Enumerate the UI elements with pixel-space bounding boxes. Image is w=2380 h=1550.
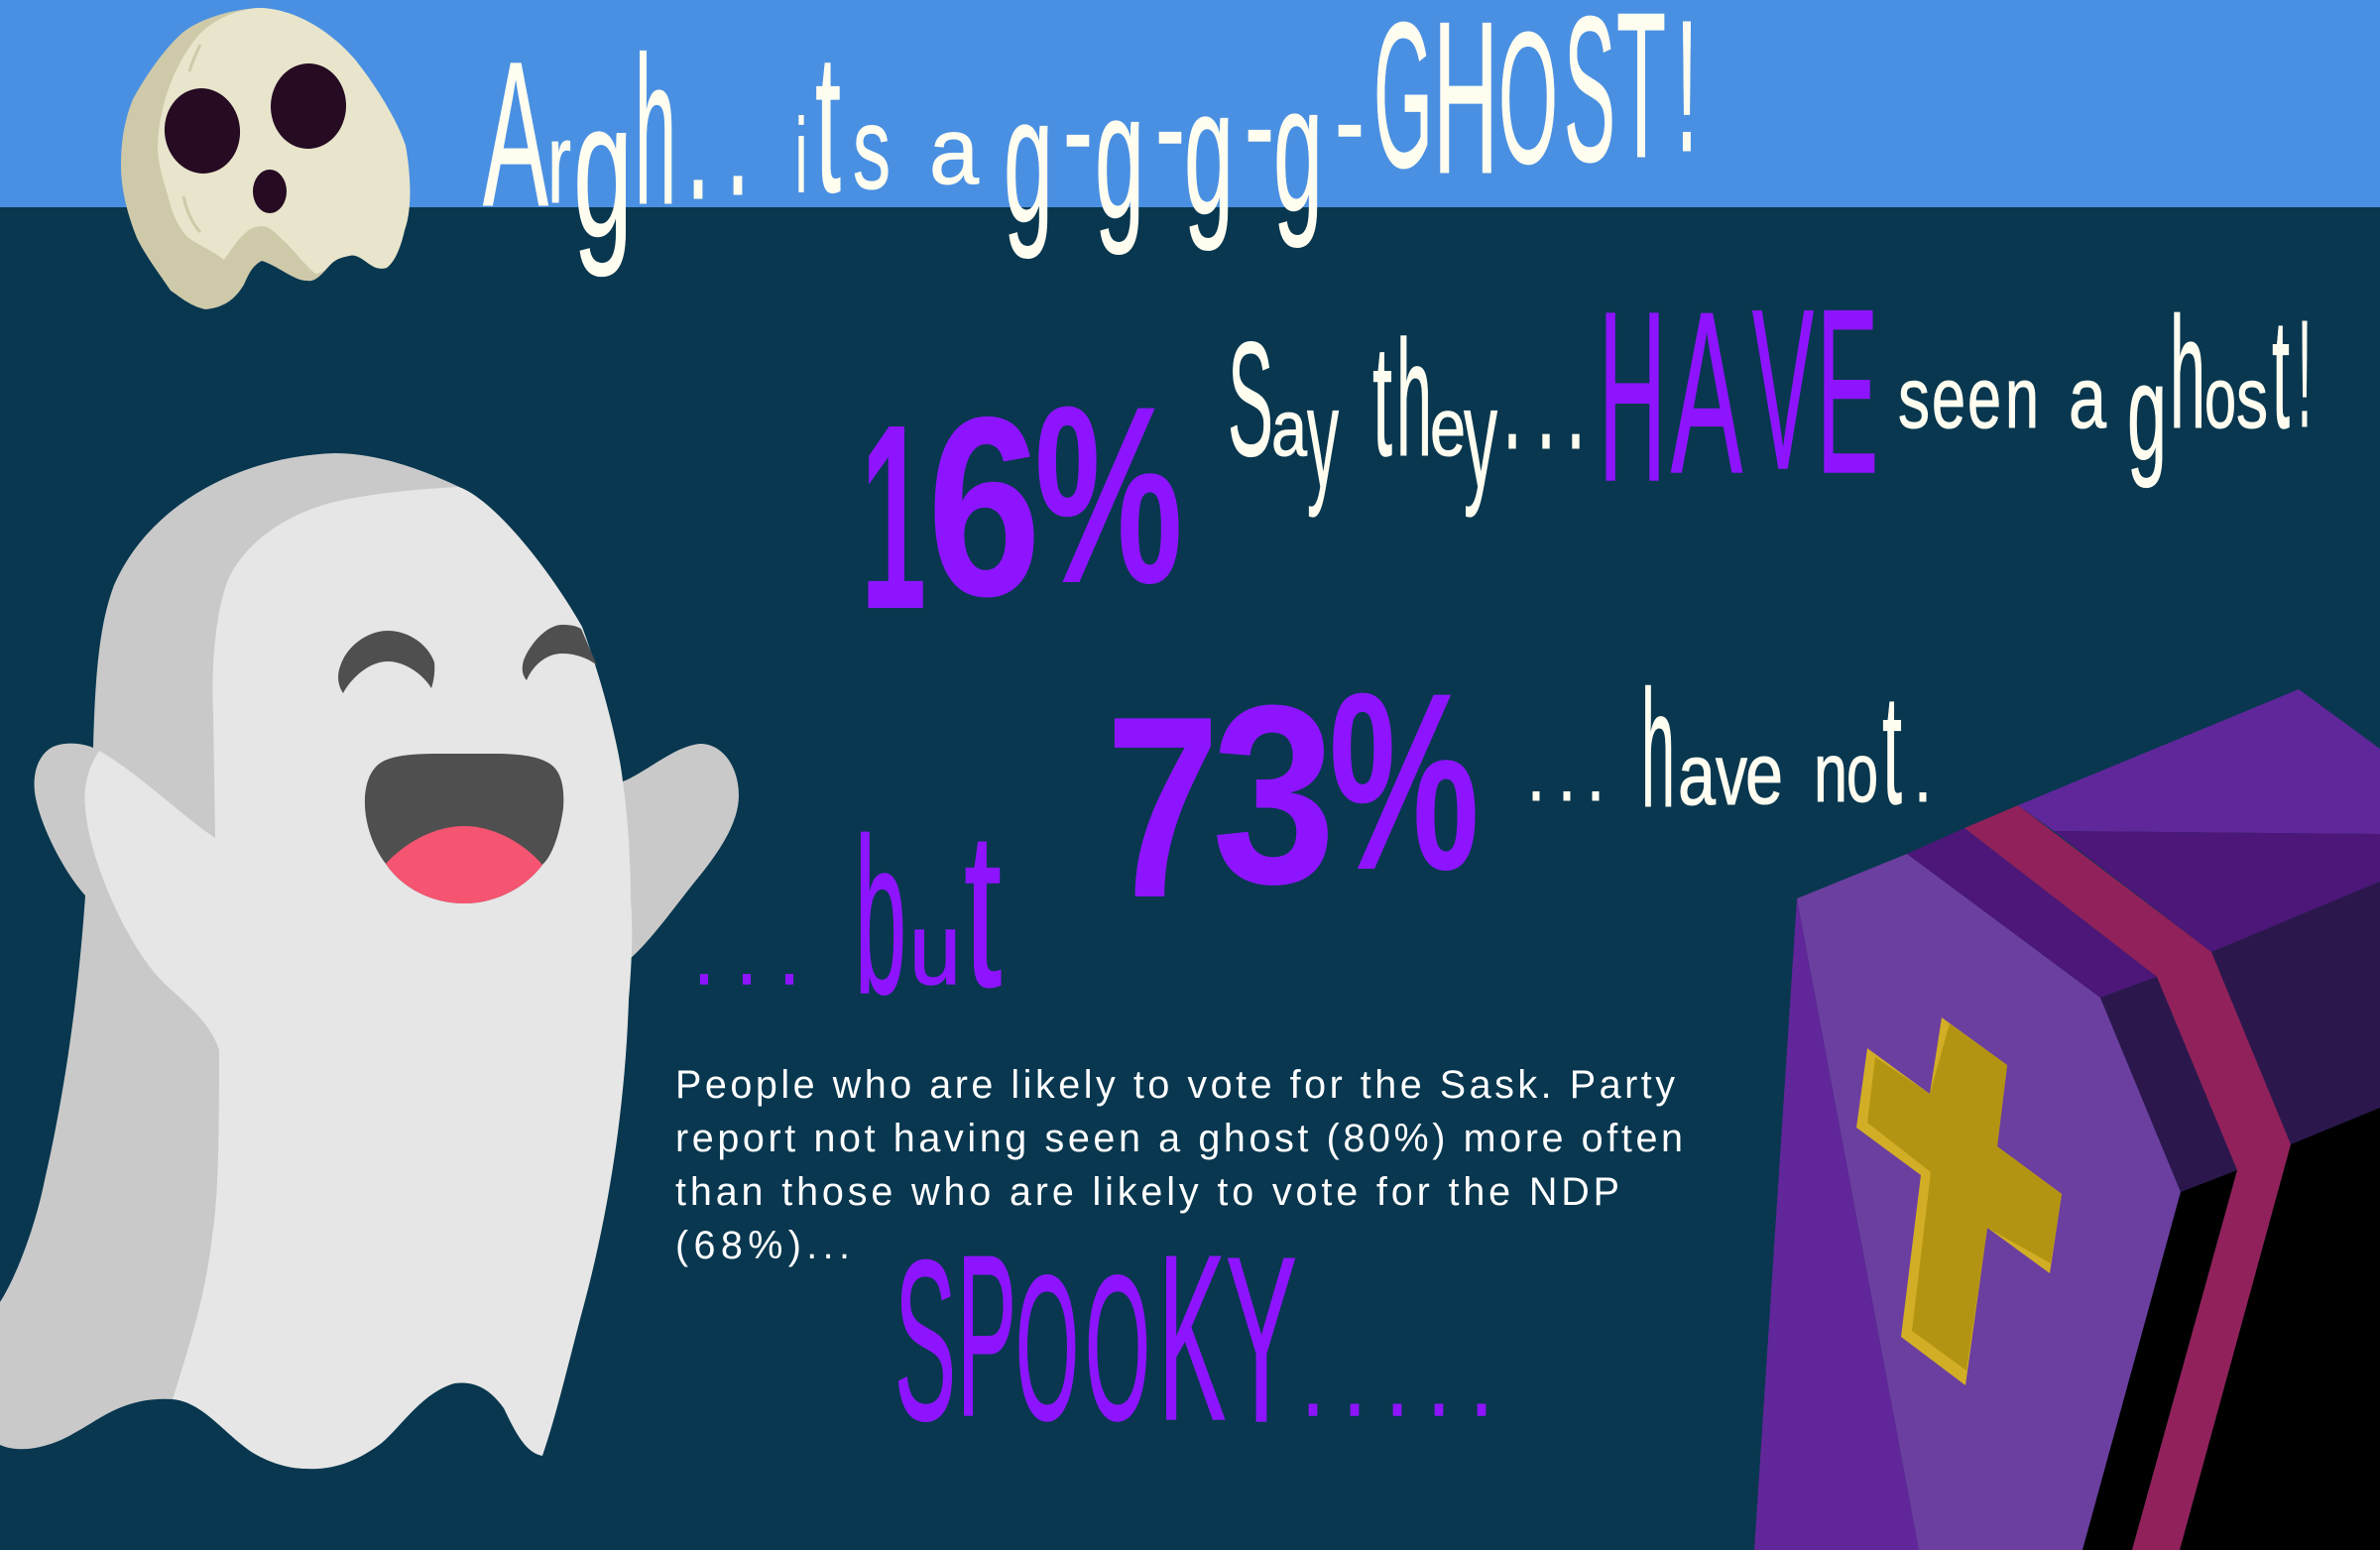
ghost shadow silhouette: [0, 453, 459, 1449]
header band: [0, 0, 2380, 207]
text: ... have not.: h: [1641, 656, 1675, 842]
text: seen a ghost!: s: [2236, 350, 2268, 446]
statistic: 73%: %: [1329, 641, 1480, 923]
text: Say they...: .: [1566, 331, 1586, 476]
text: SPOOKY.....: .: [1344, 1326, 1366, 1437]
text: Say they...: y: [1307, 357, 1339, 518]
text: SPOOKY.....: O: [1085, 1234, 1150, 1464]
text: SPOOKY.....: .: [1302, 1326, 1324, 1437]
body text paragraph: People who are likely to vote for the Sask. Party: [675, 1063, 1675, 1107]
text: ... but: .: [779, 908, 799, 1003]
title: A: [483, 20, 548, 250]
text: ... have not.: v: [1716, 727, 1747, 823]
text: !: [2298, 289, 2312, 459]
text: seen a ghost!: e: [1932, 350, 1965, 446]
title: -: [1245, 47, 1274, 202]
text: Say they...: t: [1372, 311, 1392, 489]
title: t: [815, 13, 841, 234]
text: seen a ghost!: a: [2069, 350, 2106, 446]
ghost light body: [85, 487, 632, 1469]
text: ... but: .: [737, 908, 757, 1003]
title: h: [635, 13, 676, 248]
text: SPOOKY.....: .: [1428, 1326, 1450, 1437]
text: E: [1817, 261, 1878, 523]
text: Say they...: a: [1271, 384, 1307, 472]
title: O: [1498, 0, 1558, 203]
text: ... but: b: [855, 793, 906, 1040]
icon: gold cross: [1856, 1017, 2062, 1385]
text: seen a ghost!: h: [2170, 284, 2205, 461]
text: SPOOKY.....: .: [1471, 1326, 1492, 1437]
title: -: [1335, 42, 1365, 197]
coffin black base: [2082, 1170, 2237, 1550]
title: g: [573, 60, 633, 278]
text: ... but: t: [964, 785, 1002, 1033]
text: ... but: u: [909, 893, 961, 1006]
statistic: 73%: 3: [1212, 653, 1336, 937]
title: .: [726, 43, 750, 231]
text: ... have not.: .: [1914, 730, 1932, 818]
statistic: 16%: 6: [927, 363, 1041, 650]
ghost mouth: [365, 754, 563, 903]
coffin dark side: [2100, 977, 2237, 1192]
text: Say they...: .: [1536, 331, 1556, 476]
title: -: [1155, 49, 1185, 204]
text: SPOOKY.....: S: [894, 1213, 956, 1468]
text: Say they...: y: [1464, 357, 1497, 518]
text: HAVE: A: [1671, 265, 1742, 522]
title: g: [1095, 56, 1144, 256]
title: -: [1063, 52, 1093, 207]
text: Say they...: h: [1396, 307, 1432, 491]
body text paragraph: report not having seen a ghost (80%) more often: [675, 1117, 1683, 1160]
text: SPOOKY.....: .: [1386, 1326, 1408, 1437]
text: seen a ghost!: s: [1898, 350, 1930, 446]
coffin red band: [1964, 805, 2291, 1550]
text: Say they...: S: [1228, 308, 1273, 490]
text: SPOOKY.....: O: [1015, 1234, 1079, 1464]
ghost right arm: [623, 744, 739, 960]
text: SPOOKY.....: P: [957, 1208, 1016, 1465]
title: g: [1273, 49, 1323, 249]
title: .: [686, 47, 710, 235]
text: ... have not.: a: [1678, 727, 1716, 823]
text: seen a ghost!: t: [2272, 287, 2290, 461]
text: SPOOKY.....: Y: [1226, 1209, 1297, 1472]
body text paragraph: [675, 1063, 1683, 1267]
text: ... have not.: .: [1558, 729, 1576, 817]
text: seen a ghost!: e: [1967, 350, 2001, 446]
text: Say they...: e: [1430, 381, 1466, 473]
text: Say they...: .: [1502, 331, 1522, 476]
icon: ghost: [0, 453, 739, 1469]
text: ... but: .: [694, 908, 714, 1003]
statistic: 73%: 7: [1106, 663, 1220, 952]
body text paragraph: (68%)...: [675, 1224, 850, 1267]
coffin lid face: [1797, 854, 2181, 1550]
text: HAVE: V: [1752, 262, 1814, 517]
text: HAVE: H: [1599, 261, 1666, 532]
coffin top: [2018, 689, 2380, 834]
text: ... have not.: n: [1814, 726, 1847, 819]
text: seen a ghost!: o: [2204, 350, 2236, 446]
statistic: 16%: %: [1034, 354, 1183, 637]
text: ... have not.: o: [1846, 726, 1878, 819]
icon: coffin: [1754, 689, 2380, 1550]
title: i: [795, 97, 807, 214]
text: seen a ghost!: g: [2127, 336, 2167, 489]
ghost tongue: [386, 826, 542, 903]
icon: skull: [121, 8, 410, 309]
ghost eyes: [338, 631, 434, 693]
coffin lid left bevel: [1754, 898, 1919, 1550]
text: ... have not.: e: [1745, 726, 1783, 822]
title: s: [853, 83, 891, 214]
text: ... have not.: .: [1587, 729, 1605, 817]
text: seen a ghost!: n: [2005, 350, 2039, 446]
statistic: 16%: 1: [861, 370, 926, 664]
title: g: [1004, 60, 1053, 260]
title: a: [929, 98, 980, 204]
title: r: [547, 100, 571, 227]
text: ... have not.: t: [1882, 662, 1902, 837]
text: ... have not.: .: [1527, 729, 1545, 817]
text: SPOOKY.....: K: [1158, 1207, 1226, 1470]
body text paragraph: than those who are likely to vote for the NDP: [675, 1170, 1619, 1214]
title: g: [1184, 52, 1234, 252]
